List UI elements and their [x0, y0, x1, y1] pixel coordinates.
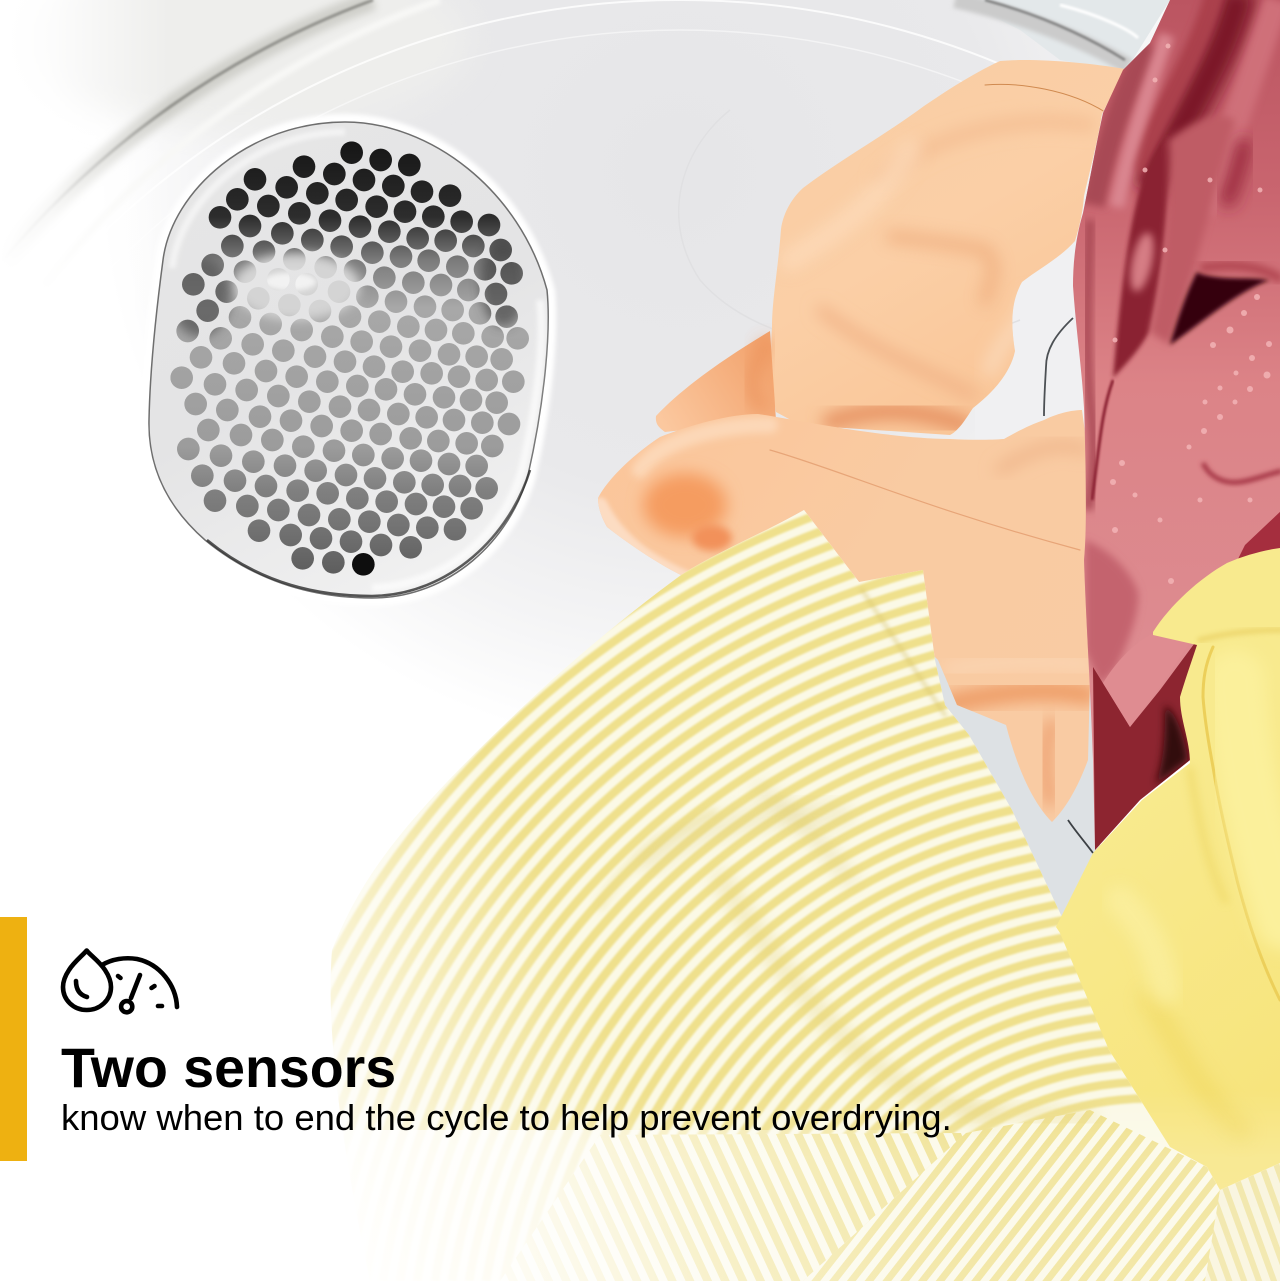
callout: two sensors: [0, 917, 952, 1161]
lint filter plate: [140, 110, 560, 610]
red fabric: lower dark underlay: [1093, 640, 1205, 852]
striped fabric: lower folds: [500, 1133, 966, 1281]
icon: water drop and gauge: [60, 948, 180, 1015]
red fabric: upper folds: [1150, 0, 1240, 190]
striped fabric: fold shading: [600, 590, 1090, 1118]
filter holes: [170, 141, 529, 576]
description text: know when to end the cycle to help prevent overdrying.: [61, 1097, 952, 1138]
garment: white and yellow striped fabric: [330, 510, 1280, 1281]
garment: lower orange sleeve: [598, 410, 1090, 822]
garment: small orange fold: [656, 331, 776, 432]
garment: red polka-dot fabric: [1073, 0, 1280, 852]
drum rim arcs: [3, 0, 1138, 348]
fade of the drum into white at the left: [0, 0, 170, 800]
polka dots: [1110, 44, 1272, 584]
white fade over lower-left of the laundry: [0, 640, 1280, 1281]
red fabric: flap: [1103, 654, 1132, 727]
garment: solid yellow fabric: [1056, 548, 1280, 1190]
drum seam line near bottom: [1068, 820, 1093, 853]
garment: upper orange sleeve: [771, 60, 1125, 435]
center hub line: [1044, 318, 1073, 416]
heading: Two sensors: [61, 1037, 396, 1099]
red fabric: central gash: [1113, 135, 1169, 378]
accent bar: [0, 917, 27, 1161]
